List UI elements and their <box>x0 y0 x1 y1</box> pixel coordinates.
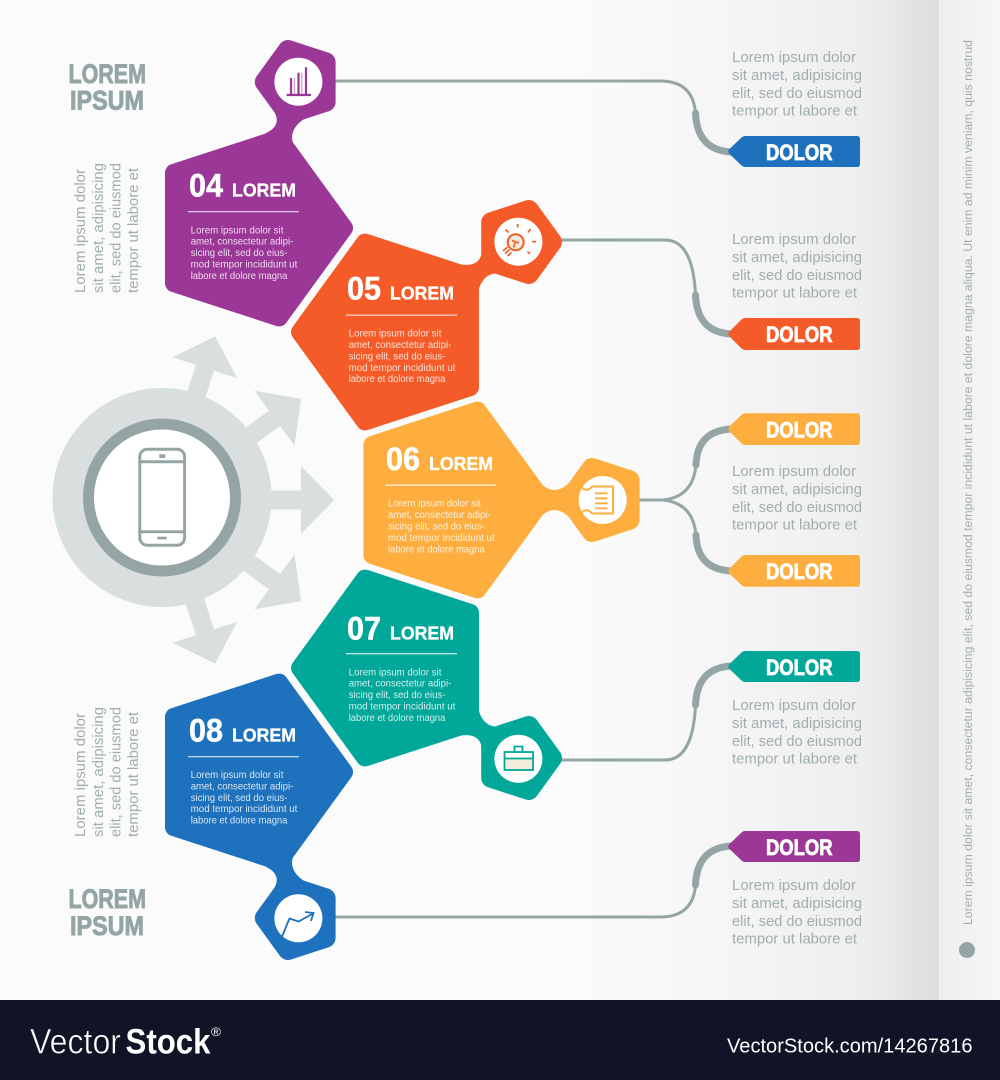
radiating arrows <box>161 326 334 674</box>
tag: purple dolor: DOLOR <box>766 835 833 860</box>
text block: right 4: elit, sed do eiusmod <box>732 734 862 750</box>
left heading: top: IPSUM <box>70 86 144 116</box>
body text 08: sicing elit, sed do eius- <box>191 793 287 804</box>
footer logo: Stock <box>126 1022 211 1061</box>
left heading: bottom <box>68 884 146 941</box>
tag: yellow dolor upper <box>728 413 860 445</box>
heading 06: 06 <box>386 441 420 477</box>
body text 07: amet, consectetur adipi- <box>349 679 451 690</box>
text block: right 3: tempor ut labore et <box>732 518 857 534</box>
text block: right 4: Lorem ipsum dolor <box>732 698 856 714</box>
heading 04: 04 <box>189 168 223 204</box>
tag: teal dolor <box>728 651 860 682</box>
rotated text: lower left: sit amet, adipisicing <box>91 707 107 837</box>
text block: right 1 <box>732 50 862 120</box>
heading 08: 08 <box>189 713 223 749</box>
body text 06: labore et dolore magna <box>388 544 485 555</box>
tag: blue dolor <box>728 136 860 167</box>
body text 06: amet, consectetur adipi- <box>388 510 491 521</box>
tag: yellow dolor upper: DOLOR <box>766 417 833 442</box>
text block: right 5: sit amet, adipisicing <box>732 896 862 912</box>
text block: right 2: tempor ut labore et <box>732 286 857 302</box>
tag: yellow dolor lower: DOLOR <box>766 559 833 584</box>
body text 08: amet, consectetur adipi- <box>191 781 293 792</box>
central hub with phone and arrows <box>52 326 334 674</box>
body text 05: amet, consectetur adipi- <box>349 340 451 351</box>
body text 04: amet, consectetur adipi- <box>191 237 293 248</box>
left heading: bottom: IPSUM <box>70 911 144 941</box>
rotated text: upper left <box>73 163 142 293</box>
body text 07 <box>349 667 456 724</box>
text block: right 4 <box>732 698 862 768</box>
body text 07: labore et dolore magna <box>349 713 446 724</box>
left heading: top: LOREM <box>68 59 146 89</box>
body text 07: Lorem ipsum dolor sit <box>349 667 442 678</box>
text block: right 1: elit, sed do eiusmod <box>732 86 862 102</box>
footer reference: VectorStock.com/14267816 <box>727 1036 972 1058</box>
body text 08: mod tempor incididunt ut <box>191 804 298 815</box>
tag: purple dolor <box>728 831 860 862</box>
tag: yellow dolor lower <box>728 555 860 587</box>
heading 05 <box>347 270 454 306</box>
panel: 08 blue <box>174 683 344 950</box>
text block: right 5 <box>732 878 862 948</box>
heading 07: 07 <box>347 610 381 646</box>
text block: right 2 <box>732 232 862 302</box>
body text 05: labore et dolore magna <box>349 374 446 385</box>
body text 04: Lorem ipsum dolor sit <box>191 225 284 236</box>
text block: right 5: elit, sed do eiusmod <box>732 914 862 930</box>
panel: 07 teal <box>300 579 552 790</box>
text block: right 5: Lorem ipsum dolor <box>732 878 856 894</box>
body text 07: sicing elit, sed do eius- <box>349 690 445 701</box>
panel: 04 purple <box>174 50 344 317</box>
text block: right 1: Lorem ipsum dolor <box>732 50 856 66</box>
body text 07: mod tempor incididunt ut <box>349 702 456 712</box>
heading 04: LOREM <box>232 180 296 201</box>
footer bar <box>0 1000 1000 1080</box>
rotated text: upper left: Lorem ipsum dolor <box>73 169 89 293</box>
side strip vertical text: Lorem ipsum dolor sit amet, consectetur adipisicing elit, sed do eiusmod tempor incididunt ut labore et dolore magna aliqua. Ut enim ad minim veniam, quis nostrud <box>963 40 975 925</box>
rotated text: lower left: tempor ut labore et <box>126 712 142 837</box>
body text 04: labore et dolore magna <box>191 271 288 282</box>
panel: 05 orange <box>300 210 552 421</box>
heading 05: 05 <box>347 270 381 306</box>
body text 08 <box>191 770 298 827</box>
rotated text: lower left: Lorem ipsum dolor <box>73 713 89 837</box>
body text 06: Lorem ipsum dolor sit <box>388 499 481 510</box>
connector lines <box>335 81 731 917</box>
body text 05: Lorem ipsum dolor sit <box>349 329 442 340</box>
text block: right 2: Lorem ipsum dolor <box>732 232 856 248</box>
side strip <box>939 0 1000 1000</box>
tag: orange dolor <box>728 318 860 350</box>
icon: bar chart <box>274 58 322 106</box>
left heading: bottom: LOREM <box>68 884 146 914</box>
heading 04 <box>189 168 296 204</box>
panel: 06 yellow <box>372 411 630 589</box>
left heading: top <box>68 59 146 116</box>
text block: right 3: elit, sed do eiusmod <box>732 500 862 516</box>
body text 06: mod tempor incididunt ut <box>388 533 495 544</box>
body text 08: labore et dolore magna <box>191 816 288 827</box>
text block: right 3 <box>732 464 862 534</box>
icon: trend arrow <box>274 894 322 942</box>
body text 06: sicing elit, sed do eius- <box>388 522 485 532</box>
body text 04: sicing elit, sed do eius- <box>191 248 287 259</box>
icon: smartphone <box>140 449 185 545</box>
heading 06: LOREM <box>429 453 493 474</box>
text block: right 3: sit amet, adipisicing <box>732 482 862 498</box>
rotated text: upper left: tempor ut labore et <box>126 168 142 293</box>
rotated text: upper left: sit amet, adipisicing <box>91 163 107 293</box>
tag: orange dolor: DOLOR <box>766 322 833 347</box>
icon: document <box>579 476 627 524</box>
text block: right 5: tempor ut labore et <box>732 932 857 948</box>
body text 05: mod tempor incididunt ut <box>349 363 456 374</box>
icon: light bulb <box>494 218 542 266</box>
text block: right 1: tempor ut labore et <box>732 104 857 120</box>
rotated text: upper left: elit, sed do eiusmod <box>108 163 124 293</box>
body text 08: Lorem ipsum dolor sit <box>191 770 284 781</box>
body text 04 <box>191 225 298 282</box>
body text 05: sicing elit, sed do eius- <box>349 351 445 362</box>
body text 06 <box>388 499 495 555</box>
heading 08 <box>189 713 296 749</box>
tag: teal dolor: DOLOR <box>766 655 833 680</box>
rotated text: lower left <box>73 707 142 837</box>
rotated text: lower left: elit, sed do eiusmod <box>108 707 124 837</box>
heading 07 <box>347 610 454 646</box>
side strip dot <box>959 942 975 958</box>
heading 06 <box>386 441 493 477</box>
heading 07: LOREM <box>390 622 454 643</box>
text block: right 4: tempor ut labore et <box>732 752 857 768</box>
body text 04: mod tempor incididunt ut <box>191 260 298 270</box>
text block: right 4: sit amet, adipisicing <box>732 716 862 732</box>
tag: blue dolor: DOLOR <box>766 140 833 165</box>
text block: right 1: sit amet, adipisicing <box>732 68 862 84</box>
text block: right 2: sit amet, adipisicing <box>732 250 862 266</box>
icon: briefcase <box>494 735 542 783</box>
heading 08: LOREM <box>232 725 296 746</box>
heading 05: LOREM <box>390 282 454 303</box>
footer logo: Vector <box>30 1022 121 1061</box>
text block: right 2: elit, sed do eiusmod <box>732 268 862 284</box>
footer logo <box>30 1022 221 1061</box>
text block: right 3: Lorem ipsum dolor <box>732 464 856 480</box>
footer logo: ® <box>211 1025 221 1039</box>
body text 05 <box>349 329 456 385</box>
